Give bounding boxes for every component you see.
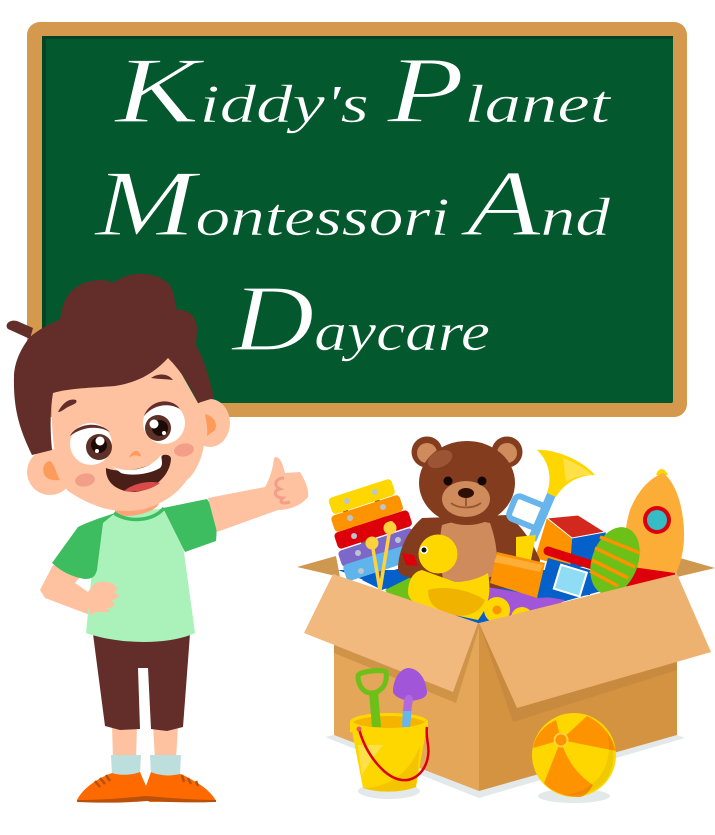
chalkboard <box>27 22 687 417</box>
title line 3: D aycare <box>230 267 490 371</box>
bar connectors <box>345 495 402 580</box>
green board <box>42 36 673 403</box>
wooden frame <box>27 22 687 417</box>
tongue <box>124 482 160 492</box>
neck <box>115 498 159 516</box>
ground shadow <box>325 735 685 798</box>
trumpet bell <box>537 450 595 497</box>
xylophone <box>328 478 417 590</box>
trumpet mouthpiece <box>516 535 536 560</box>
mouth <box>106 455 171 492</box>
right front flap <box>479 574 711 708</box>
boy character <box>7 274 308 803</box>
bear smile <box>451 498 481 508</box>
cube left side <box>535 518 572 568</box>
pupil <box>91 437 107 453</box>
wheels <box>484 597 510 623</box>
ball base <box>532 713 616 797</box>
left sleeve <box>52 513 115 579</box>
collar <box>114 508 164 519</box>
blue bar <box>342 543 416 582</box>
rocket porthole <box>643 506 671 534</box>
duck head <box>418 534 458 574</box>
bucket interior <box>353 716 425 728</box>
bucket shadow <box>358 783 420 799</box>
thumbs-up arm <box>208 457 308 532</box>
board inner shadow <box>42 36 673 403</box>
maraca body <box>581 520 649 602</box>
iris <box>145 415 171 441</box>
t-shirt <box>86 508 195 642</box>
blue shovel stem <box>402 708 412 727</box>
green spade loop <box>358 671 386 693</box>
yellow bar <box>328 478 396 515</box>
toy trumpet <box>508 450 595 560</box>
rocket body <box>625 473 684 585</box>
rubber duck <box>402 534 489 620</box>
rocket tip <box>656 469 668 475</box>
bear belly <box>440 521 497 590</box>
bear <box>398 436 540 590</box>
highlights <box>96 436 104 446</box>
left box face <box>334 623 479 791</box>
iris <box>86 434 112 460</box>
bucket handle <box>359 727 428 780</box>
ball shadow <box>538 789 610 803</box>
orange bar <box>330 494 404 533</box>
red fin <box>625 567 676 590</box>
purple bar <box>337 527 417 568</box>
bucket with spade and shovel <box>350 668 428 799</box>
left eye <box>70 423 112 465</box>
red bar <box>333 509 413 550</box>
pupil <box>152 420 168 436</box>
eyebrows <box>58 374 173 412</box>
teeth <box>112 455 162 475</box>
orange wedges <box>533 716 616 797</box>
shorts <box>93 634 190 731</box>
eye white <box>143 402 185 444</box>
train base <box>487 587 565 622</box>
bucket shading <box>363 745 420 792</box>
maraca stripes <box>590 537 640 586</box>
duck eye <box>420 546 428 554</box>
back flaps <box>297 556 715 577</box>
right inner ear <box>205 414 216 436</box>
purple shovel head <box>393 668 427 701</box>
bell highlight <box>563 458 592 482</box>
duck body <box>408 570 489 620</box>
toy box <box>297 436 715 798</box>
duck wing <box>428 588 485 616</box>
hair tuft <box>7 321 33 339</box>
cube top <box>547 515 605 538</box>
handle rivet <box>356 726 362 732</box>
flap shadows <box>334 623 479 703</box>
right eye <box>143 401 185 444</box>
shoes <box>77 772 216 802</box>
right ear <box>190 399 230 447</box>
cheeks <box>74 472 96 488</box>
cabin roof <box>548 551 592 565</box>
bucket rim <box>350 713 428 736</box>
bear eyes <box>444 476 452 486</box>
right box face <box>479 623 677 791</box>
resting hand <box>88 582 119 615</box>
highlights <box>150 420 158 428</box>
box interior <box>338 570 677 625</box>
shoe soles <box>77 796 216 803</box>
toy train <box>484 551 592 629</box>
toy cube <box>535 515 606 568</box>
finger lines <box>275 478 290 503</box>
porthole glass <box>647 510 667 530</box>
mallets <box>366 522 396 590</box>
left front flap <box>304 574 478 692</box>
hair <box>14 274 214 455</box>
face <box>52 350 205 511</box>
eye white <box>70 423 112 465</box>
eyelid <box>70 425 110 436</box>
bear nose <box>458 488 474 498</box>
left inner ear <box>43 461 60 480</box>
ball shade <box>562 729 614 796</box>
green filler toy <box>385 575 425 610</box>
ball hub <box>554 732 568 748</box>
shoe laces <box>95 775 198 787</box>
dark blue bar <box>362 565 414 590</box>
engine highlight <box>494 555 543 572</box>
title line 1: K iddy's P lanet <box>112 39 613 143</box>
rocket <box>625 469 684 590</box>
cabin window <box>554 565 587 597</box>
muzzle <box>442 481 490 517</box>
legs <box>112 725 178 760</box>
bear head <box>419 441 515 525</box>
beach ball <box>532 713 616 803</box>
left arm <box>40 565 95 615</box>
nose <box>129 451 141 458</box>
bar rivets <box>344 489 401 574</box>
eyelid <box>144 401 180 416</box>
purple shovel grip <box>403 695 413 711</box>
trumpet handle <box>508 495 546 529</box>
engine <box>490 552 545 598</box>
green spade stem <box>369 692 381 727</box>
bucket body <box>352 731 426 792</box>
cabin <box>537 558 590 598</box>
bucket highlight <box>358 745 383 775</box>
title <box>92 39 613 371</box>
cube right side <box>570 532 606 568</box>
right sleeve <box>163 499 217 552</box>
bear body <box>398 515 540 590</box>
duck beak <box>402 553 418 566</box>
bear ears <box>412 436 442 468</box>
title line 2: M ontessori A nd <box>92 152 611 256</box>
socks <box>111 755 181 775</box>
maraca <box>581 520 649 602</box>
trumpet tube <box>532 493 552 540</box>
left ear <box>27 449 73 495</box>
head highlight <box>425 446 455 472</box>
